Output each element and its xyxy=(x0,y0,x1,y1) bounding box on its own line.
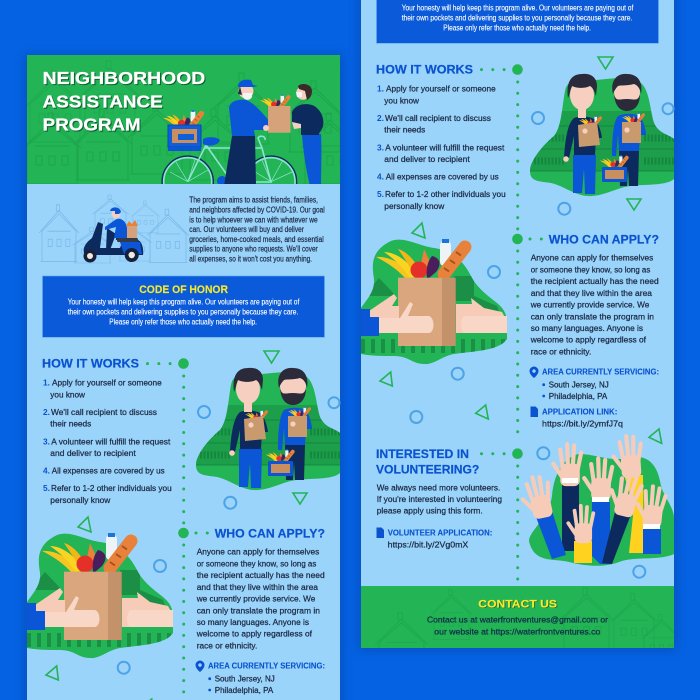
list: how it works steps: Apply for yourself or someone xyxy=(52,378,162,388)
text: volunteering paragraph: We always need more volunteers. xyxy=(377,482,500,492)
illustration: delivery volunteer with bicycle xyxy=(161,80,324,184)
heading: who can apply: WHO CAN APPLY? xyxy=(549,233,659,247)
right hands xyxy=(456,298,507,333)
heading: interested in volunteering: INTERESTED IN xyxy=(376,447,469,461)
callout: code of honor: Your honesty will help keep this program alive. Our volunteers are paying out of xyxy=(68,298,300,307)
list: how it works steps: you know xyxy=(384,95,420,105)
intro text xyxy=(189,196,325,264)
list: how it works steps: A volunteer will fulfill the request xyxy=(385,142,505,152)
footer text: our website at https://waterfrontventures.co xyxy=(434,626,601,636)
text: area currently servicing: AREA CURRENTLY SERVICING: xyxy=(208,662,325,671)
heading: who can apply: WHO CAN APPLY? xyxy=(215,527,325,541)
illustration: scooter rider with houses xyxy=(39,195,189,263)
text: who can apply paragraph: the recipient actually has the need xyxy=(197,570,325,580)
recipient xyxy=(292,84,323,186)
list: how it works steps: We'll call recipient to discuss xyxy=(51,407,157,417)
deliverer xyxy=(224,80,270,186)
intro text: groceries, home-cooked meals, and essential xyxy=(189,235,324,244)
illustration: hands holding grocery bag xyxy=(27,530,177,660)
text: area currently servicing: South Jersey, NJ xyxy=(549,379,609,389)
callout: code of honor continued xyxy=(376,0,658,43)
list: how it works steps: 1. xyxy=(377,84,384,94)
text: who can apply paragraph: can only translate the program in xyxy=(197,605,320,615)
callout: code of honor xyxy=(42,276,324,337)
list: how it works steps: and deliver to recipient xyxy=(384,154,470,164)
list: how it works steps: 1. xyxy=(43,378,50,388)
heading: how it works: HOW IT WORKS xyxy=(42,357,139,371)
header house pattern xyxy=(23,61,359,184)
panel body xyxy=(361,0,674,648)
header title: NEIGHBORHOOD xyxy=(44,69,206,89)
list: how it works steps xyxy=(43,378,172,505)
list: how it works steps: A volunteer will fulfill the request xyxy=(51,436,171,446)
text: who can apply paragraph: we currently provide service. We xyxy=(196,594,315,604)
text: application link: https://bit.ly/2ymfJ7q xyxy=(542,419,623,429)
text: volunteering paragraph: If you're interested in volunteering xyxy=(377,494,502,504)
delivery bag xyxy=(126,220,138,239)
text: who can apply paragraph: and that they live within the area xyxy=(197,582,318,592)
callout: code of honor continued: Your honesty will help keep this program alive. Our volunteers are paying out of xyxy=(402,4,634,13)
heading: interested in volunteering: VOLUNTEERING? xyxy=(376,463,479,477)
text: who can apply paragraph: race or ethnicity. xyxy=(531,346,591,356)
timeline dots xyxy=(148,358,208,695)
intro text: and neighbors affected by COVID-19. Our goal xyxy=(189,205,325,214)
text: who can apply paragraph: or someone they know, so long as xyxy=(197,558,316,568)
illustration: two men with groceries xyxy=(196,368,340,490)
callout: code of honor continued: their own pockets and delivering supplies to you personally because they care. xyxy=(402,13,632,22)
panel: right infographic page xyxy=(361,0,682,677)
callout: code of honor: CODE OF HONOR xyxy=(139,284,228,296)
text: who can apply paragraph xyxy=(530,253,659,356)
list: how it works steps: We'll call recipient to discuss xyxy=(385,113,491,123)
timeline dots xyxy=(482,64,542,580)
illustration: two men with groceries xyxy=(530,74,674,196)
man two xyxy=(266,368,312,480)
list: how it works steps: personally know xyxy=(384,201,445,211)
text: who can apply paragraph: race or ethnicity. xyxy=(197,640,257,650)
list: how it works steps: 5. xyxy=(43,483,50,493)
illustration: raised hands xyxy=(519,435,674,566)
list: how it works steps: you know xyxy=(50,389,86,399)
list: how it works steps: and deliver to recipient xyxy=(50,448,136,458)
paper bag xyxy=(398,278,456,346)
text: who can apply paragraph: welcome to apply regardless of xyxy=(196,629,313,639)
list: how it works steps: 2. xyxy=(377,113,384,123)
header title: PROGRAM xyxy=(43,115,141,135)
decorative triangles and circles xyxy=(380,57,674,578)
man one xyxy=(563,74,602,194)
intro text: can. Our volunteers will buy and deliver xyxy=(189,225,304,234)
list: how it works steps: 4. xyxy=(43,466,50,476)
text: area currently servicing: AREA CURRENTLY SERVICING: xyxy=(542,368,659,377)
right hands xyxy=(122,592,173,627)
header title: ASSISTANCE xyxy=(43,91,163,111)
panel: contact us footer xyxy=(361,586,674,648)
panel body xyxy=(27,55,340,700)
list: how it works steps: their needs xyxy=(50,419,91,429)
text: who can apply paragraph: Anyone can apply for themselves xyxy=(197,547,319,557)
text: area currently servicing xyxy=(196,660,325,695)
text: area currently servicing: South Jersey, NJ xyxy=(215,673,275,683)
panel: left infographic page xyxy=(23,55,359,700)
callout: code of honor continued: Please only refer those who actually need the help. xyxy=(443,23,591,32)
header title: PROGRAM xyxy=(44,116,142,136)
outlined houses xyxy=(39,195,189,263)
text: who can apply paragraph: so many languages. Anyone is xyxy=(197,617,309,627)
paper bag xyxy=(64,572,122,640)
illustration: hands holding grocery bag xyxy=(361,236,511,366)
basket xyxy=(163,110,201,151)
list: how it works steps: Apply for yourself or someone xyxy=(386,84,496,94)
text: volunteer application: VOLUNTEER APPLICATION: xyxy=(388,528,492,537)
list: how it works steps: All expenses are covered by us xyxy=(52,466,165,476)
text: area currently servicing: Philadelphia, PA xyxy=(215,685,274,695)
left hands and sleeve xyxy=(27,588,100,630)
list: how it works steps: personally know xyxy=(50,495,111,505)
text: application link: APPLICATION LINK: xyxy=(542,407,617,416)
list: how it works steps: All expenses are covered by us xyxy=(386,172,499,182)
text: who can apply paragraph: the recipient actually has the need xyxy=(531,276,659,286)
intro text: The program aims to assist friends, families, xyxy=(189,196,318,205)
footer house pattern xyxy=(376,588,674,648)
intro text: is to help whoever we can with whatever we xyxy=(189,215,318,224)
callout: code of honor: their own pockets and delivering supplies to you personally because they care. xyxy=(68,307,298,316)
text: area currently servicing: Philadelphia, PA xyxy=(549,391,608,401)
text: who can apply paragraph: and that they live within the area xyxy=(531,288,652,298)
man one xyxy=(229,368,268,488)
text: who can apply paragraph: so many languages. Anyone is xyxy=(531,323,643,333)
callout: code of honor: Please only refer those who actually need the help. xyxy=(109,317,257,326)
list: how it works steps: Refer to 1-2 other individuals you xyxy=(51,483,172,493)
text: who can apply paragraph: can only translate the program in xyxy=(531,311,654,321)
heading: how it works: HOW IT WORKS xyxy=(376,63,473,77)
footer heading: CONTACT US xyxy=(478,598,557,610)
header title: NEIGHBORHOOD xyxy=(43,68,205,88)
text: volunteer application xyxy=(376,528,492,550)
decorative triangles and circles xyxy=(46,351,340,700)
rider xyxy=(106,228,125,250)
text: who can apply paragraph xyxy=(196,547,325,650)
list: how it works steps: Refer to 1-2 other individuals you xyxy=(385,189,506,199)
supermarket shelves xyxy=(530,111,674,171)
list: how it works steps xyxy=(377,84,506,211)
man two xyxy=(600,74,646,186)
text: who can apply paragraph: welcome to apply regardless of xyxy=(530,335,647,345)
footer text: Contact us at waterfrontventures@gmail.com or xyxy=(427,615,608,625)
scooter xyxy=(84,222,143,255)
header title: ASSISTANCE xyxy=(44,92,164,112)
text: application link xyxy=(530,406,623,429)
heading: interested in volunteering xyxy=(376,447,479,477)
text: who can apply paragraph: Anyone can apply for themselves xyxy=(531,253,653,263)
header title xyxy=(43,68,206,136)
list: how it works steps: 5. xyxy=(377,189,384,199)
header banner xyxy=(27,55,340,184)
list: how it works steps: their needs xyxy=(384,125,425,135)
list: how it works steps: 3. xyxy=(377,142,384,152)
footer heading: CONTACT US xyxy=(479,599,558,611)
text: who can apply paragraph: or someone they know, so long as xyxy=(531,264,650,274)
intro text: supplies to anyone who requests. We'll cover xyxy=(189,245,318,254)
footer text xyxy=(427,615,608,636)
list: how it works steps: 4. xyxy=(377,172,384,182)
grocery bag xyxy=(260,95,290,133)
text: volunteering paragraph xyxy=(377,482,502,516)
intro text: all expenses, so it won't cost you anything. xyxy=(189,255,312,264)
list: how it works steps: 3. xyxy=(43,436,50,446)
list: how it works steps: 2. xyxy=(43,407,50,417)
text: who can apply paragraph: we currently provide service. We xyxy=(530,300,649,310)
text: volunteer application: https://bit.ly/2Vg0mX xyxy=(388,540,469,550)
text: volunteering paragraph: please apply using this form. xyxy=(377,506,483,516)
supermarket shelves xyxy=(196,405,340,465)
text: area currently servicing xyxy=(530,366,659,401)
left hands and sleeve xyxy=(361,294,434,336)
